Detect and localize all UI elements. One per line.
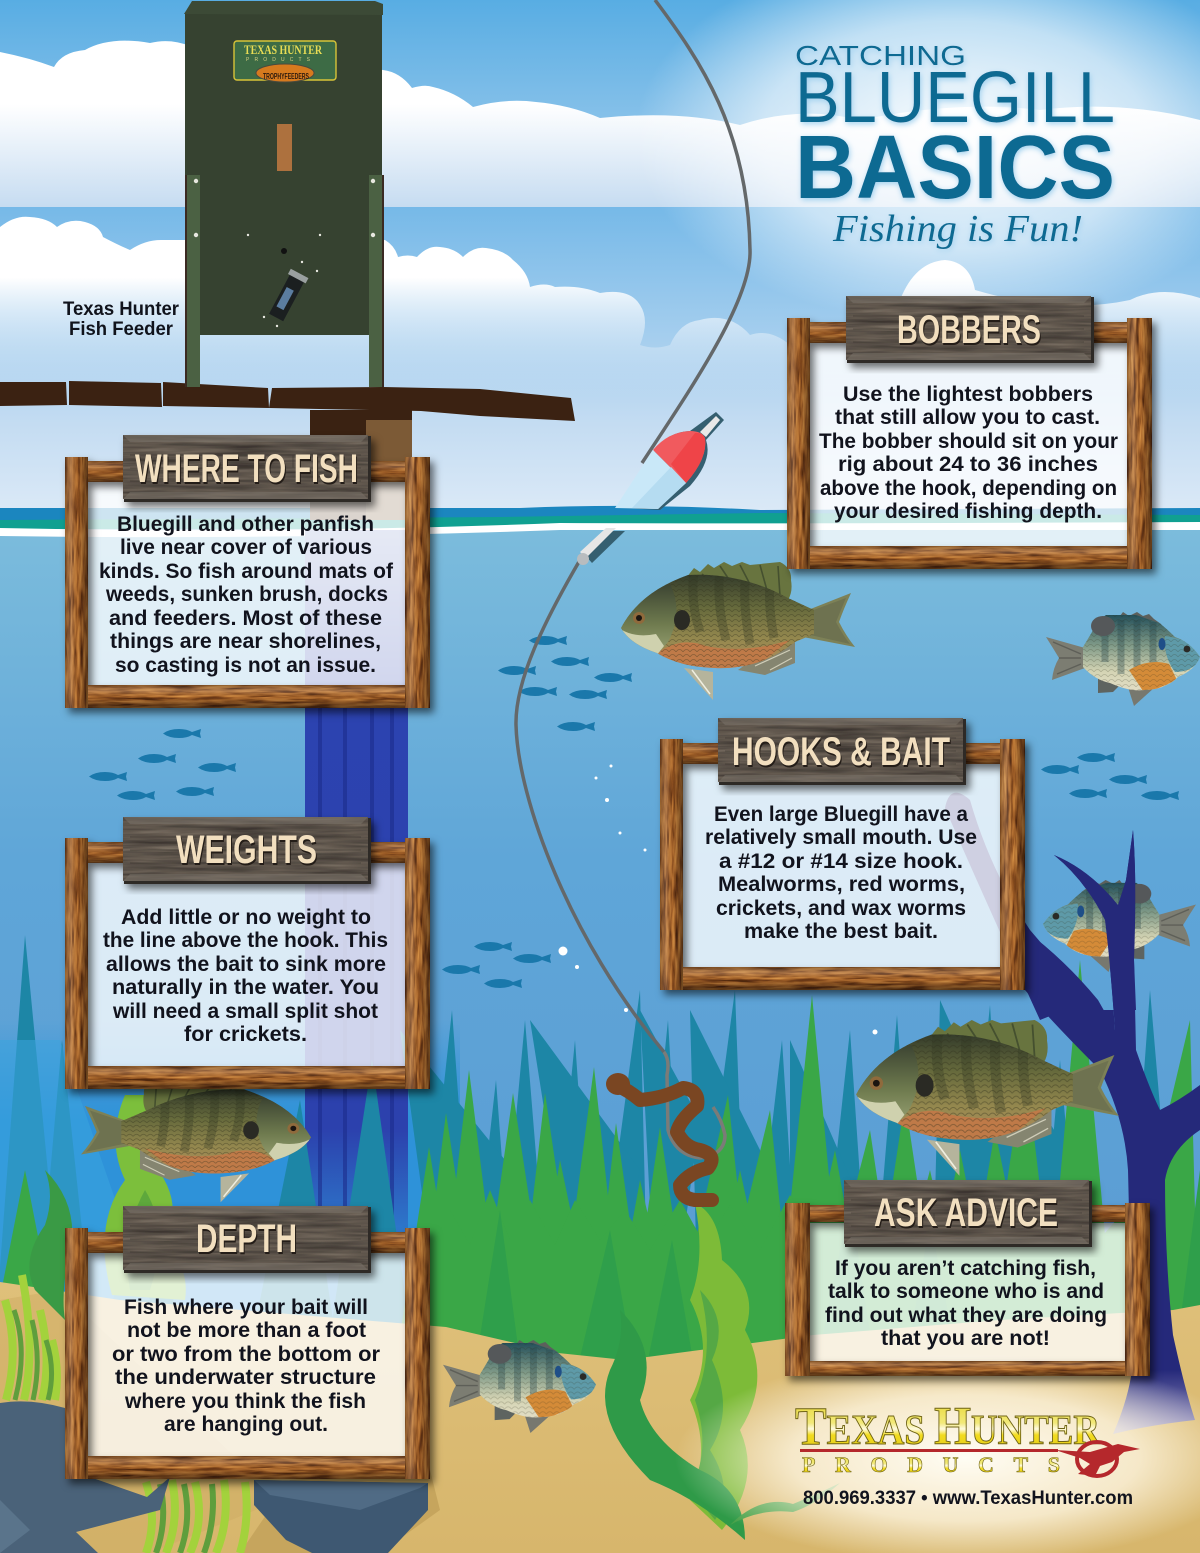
feeder lid [184,1,383,15]
body text: the line above the hook. This [103,929,388,952]
panel: weights [65,817,430,1089]
body text: find out what they are doing [825,1304,1107,1327]
tree branches [945,793,1200,1434]
body text: rig about 24 to 36 inches [838,453,1098,476]
body text: for crickets. [184,1023,307,1046]
feeder legs [185,175,384,387]
title: CATCHING [795,40,966,71]
body text: talk to someone who is and [828,1280,1104,1303]
body text: that you are not! [881,1327,1050,1350]
heading plank [123,817,371,884]
body text: naturally in the water. You [112,976,379,999]
heading plank: BOBBERS [897,308,1041,352]
kelp plants [5,1095,840,1553]
rocks [0,1401,428,1553]
body text: above the hook, depending on [820,477,1117,500]
small fish schools [89,636,1179,988]
heading plank: WEIGHTS [176,828,317,872]
panel: hooks and bait [660,718,1025,990]
sand floor [0,1282,1200,1553]
title: Fishing is Fun! [832,208,1083,250]
feeder label: Fish Feeder [69,319,174,340]
fish: large olive bluegill upper [620,562,856,702]
body text: Add little or no weight to [121,906,371,929]
feeder label: Texas Hunter [63,299,180,320]
body text: allows the bait to sink more [106,953,386,976]
body text: that still allow you to cast. [835,406,1100,429]
heading plank: HOOKS & BAIT [732,730,950,774]
feeder label [63,299,180,340]
body text: a #12 or #14 size hook. [719,850,963,873]
body text: kinds. So fish around mats of [99,560,394,583]
heading plank: WHERE TO FISH [135,447,358,491]
dock post [305,410,412,1290]
feeder brand plate: TEXAS HUNTER [244,42,322,57]
body text: relatively small mouth. Use [705,826,977,849]
fish: blue bluegill on sand [442,1340,597,1433]
body text: the underwater structure [115,1366,376,1389]
feeder [184,1,384,387]
body text: make the best bait. [744,920,938,943]
rivets [194,179,375,327]
body text: crickets, and wax worms [716,897,966,920]
panel: depth [65,1206,430,1479]
title [795,40,1115,250]
body text: your desired fishing depth. [834,500,1102,523]
heading plank [844,1180,1092,1247]
body text [819,383,1118,523]
heading plank [123,1206,371,1273]
body text: weeds, sunken brush, docks [105,583,388,606]
body text: will need a small split shot [112,1000,378,1023]
body text: Even large Bluegill have a [714,803,968,826]
feeder brand plate: PRODUCTS [246,57,311,63]
heading plank [846,296,1094,363]
body text: not be more than a foot [127,1319,366,1342]
dock [0,381,575,421]
fish: olive bluegill left [80,1078,312,1204]
hook [664,1052,725,1158]
body text: Fish where your bait will [124,1296,368,1319]
body text: where you think the fish [124,1390,366,1413]
body text: so casting is not an issue. [115,654,376,677]
bobber [577,412,724,565]
logo wordmark: TEXAS HUNTER [795,1396,1101,1456]
body text: or two from the bottom or [112,1343,380,1366]
heading plank: ASK ADVICE [874,1191,1058,1235]
feeder brand plate [234,41,336,82]
title: BLUEGILL [795,58,1115,138]
fish: blue bluegill behind tree [1042,880,1197,972]
body text [112,1296,380,1436]
body text [825,1257,1107,1350]
feeder brand plate: TROPHYFEEDERS [263,72,309,81]
body text: things are near shorelines, [110,630,381,653]
body text: and feeders. Most of these [109,607,382,630]
worm [606,1073,712,1200]
logo products line: PRODUCTS [802,1452,1060,1477]
body text: Bluegill and other panfish [117,513,374,536]
body text: Use the lightest bobbers [843,383,1093,406]
dispenser [267,269,308,322]
fish: blue bluegill upper right [1045,612,1200,706]
body text: The bobber should sit on your [819,430,1118,453]
body text: are hanging out. [164,1413,328,1436]
background seagrass [0,935,1200,1400]
contact line: 800.969.3337 • www.TexasHunter.com [803,1488,1133,1509]
panel: ask advice [785,1180,1150,1376]
body text [99,513,394,677]
water [0,506,1200,1356]
log frame [785,1203,1150,1376]
body text: live near cover of various [120,536,372,559]
title: BASICS [795,118,1115,218]
body text [103,906,388,1046]
tree overlap [1054,830,1136,1030]
title glow [635,0,1200,325]
body text [705,803,977,943]
sky background [0,0,1200,517]
logo rule [800,1449,1058,1452]
heading plank: DEPTH [196,1217,297,1261]
heading plank [718,718,966,785]
cork window [277,124,292,171]
body text: Mealworms, red worms, [718,873,965,896]
heading plank [123,435,371,502]
panel: where to fish [65,435,430,708]
logo: Texas Hunter Products [795,1396,1140,1509]
logo glow [675,1353,1200,1553]
bubbles [558,764,878,1034]
body text: If you aren’t catching fish, [835,1257,1096,1280]
icon: roadrunner emblem [1055,1442,1140,1476]
fishing line [516,0,750,1052]
panel: bobbers [787,296,1152,569]
feeder body [185,14,382,335]
fish: large olive bluegill lower right [855,1020,1120,1178]
